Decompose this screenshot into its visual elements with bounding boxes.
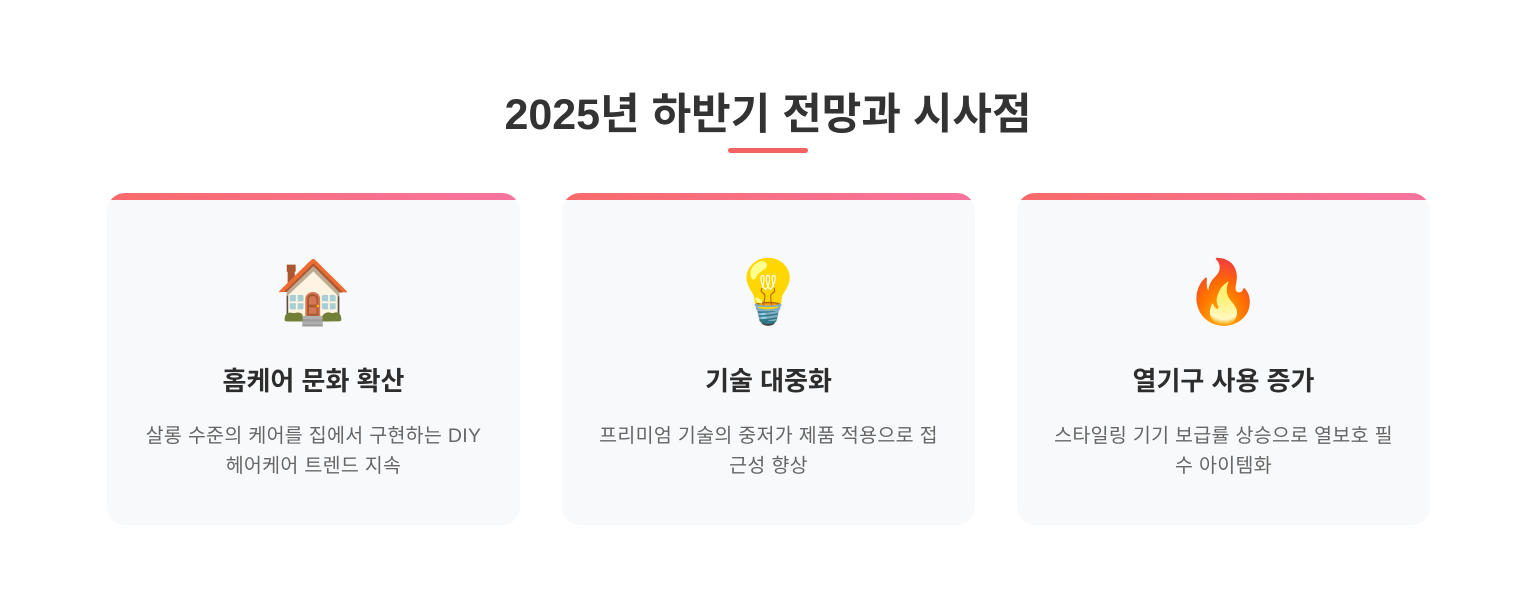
text: heat tools: 수 아이템화 [1175, 455, 1272, 477]
text: technology: 근성 향상 [729, 455, 808, 477]
text: heat tools [1054, 425, 1393, 477]
text: homecare [146, 425, 481, 477]
panel: technology [562, 193, 975, 525]
title: 2025년 하반기 전망과 시사점 [504, 91, 1032, 139]
icon: light bulb: 💡 [730, 256, 807, 329]
text: technology: 프리미엄 기술의 중저가 제품 적용으로 접 [599, 425, 938, 447]
panel: homecare [107, 193, 520, 525]
heading: heat tools: 열기구 사용 증가 [1133, 366, 1314, 396]
icon: house: 🏠 [275, 256, 352, 329]
heading: homecare: 홈케어 문화 확산 [223, 366, 404, 396]
heading: technology: 기술 대중화 [705, 366, 832, 396]
text: homecare: 헤어케어 트렌드 지속 [226, 455, 401, 477]
text: homecare: 살롱 수준의 케어를 집에서 구현하는 DIY [146, 425, 481, 447]
panel: heat tools [1017, 193, 1430, 525]
title underline [728, 148, 808, 153]
text: heat tools: 스타일링 기기 보급률 상승으로 열보호 필 [1054, 425, 1393, 447]
text: technology [599, 425, 938, 477]
icon: fire: 🔥 [1185, 256, 1262, 329]
